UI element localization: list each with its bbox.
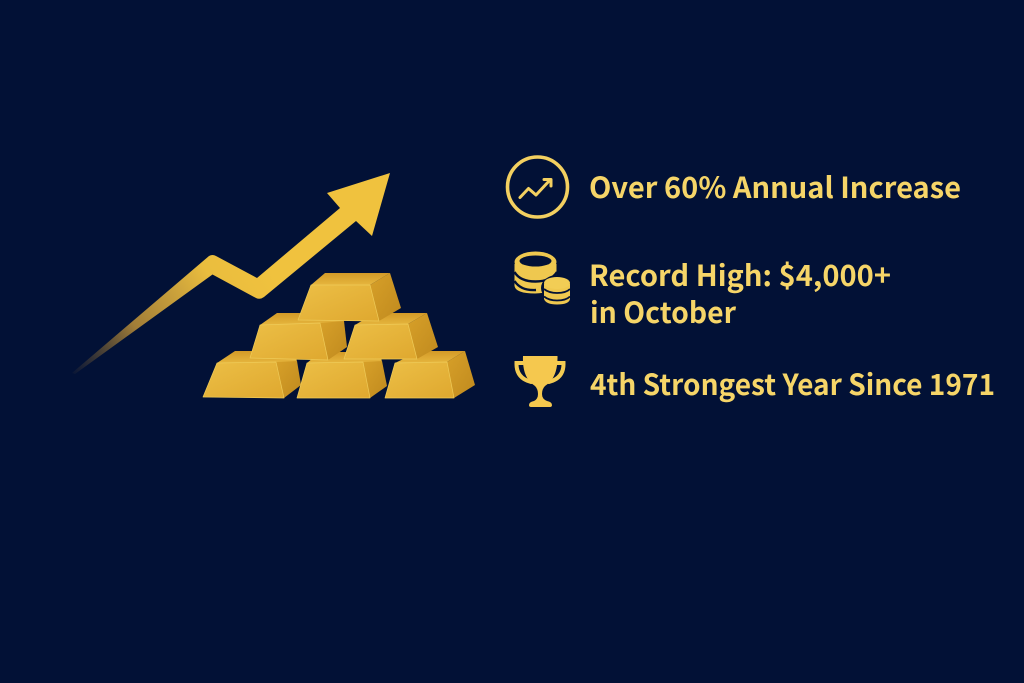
stat row: strongest year	[516, 356, 995, 407]
icon: coin stacks	[514, 252, 573, 304]
gold bar: bottom left	[203, 351, 301, 398]
icon: rising arrow	[72, 173, 390, 374]
icon: trophy	[516, 356, 564, 407]
text: record high: Record High: $4,000+	[589, 253, 891, 295]
icon: trend in circle	[508, 157, 568, 217]
gold bar: top	[298, 273, 401, 321]
text: in October: in October	[590, 290, 736, 332]
stat row: annual increase	[508, 157, 961, 217]
gold bar: middle right	[344, 313, 438, 359]
text: annual increase: Over 60% Annual Increase	[589, 165, 961, 207]
text: strongest year: 4th Strongest Year Since 1971	[590, 362, 995, 404]
stat row: record high	[514, 252, 891, 332]
gold bar: middle left	[250, 313, 347, 360]
icon: gold bars pyramid	[203, 273, 475, 398]
gold bar: bottom right	[385, 351, 475, 398]
gold bar: bottom middle	[297, 352, 387, 398]
